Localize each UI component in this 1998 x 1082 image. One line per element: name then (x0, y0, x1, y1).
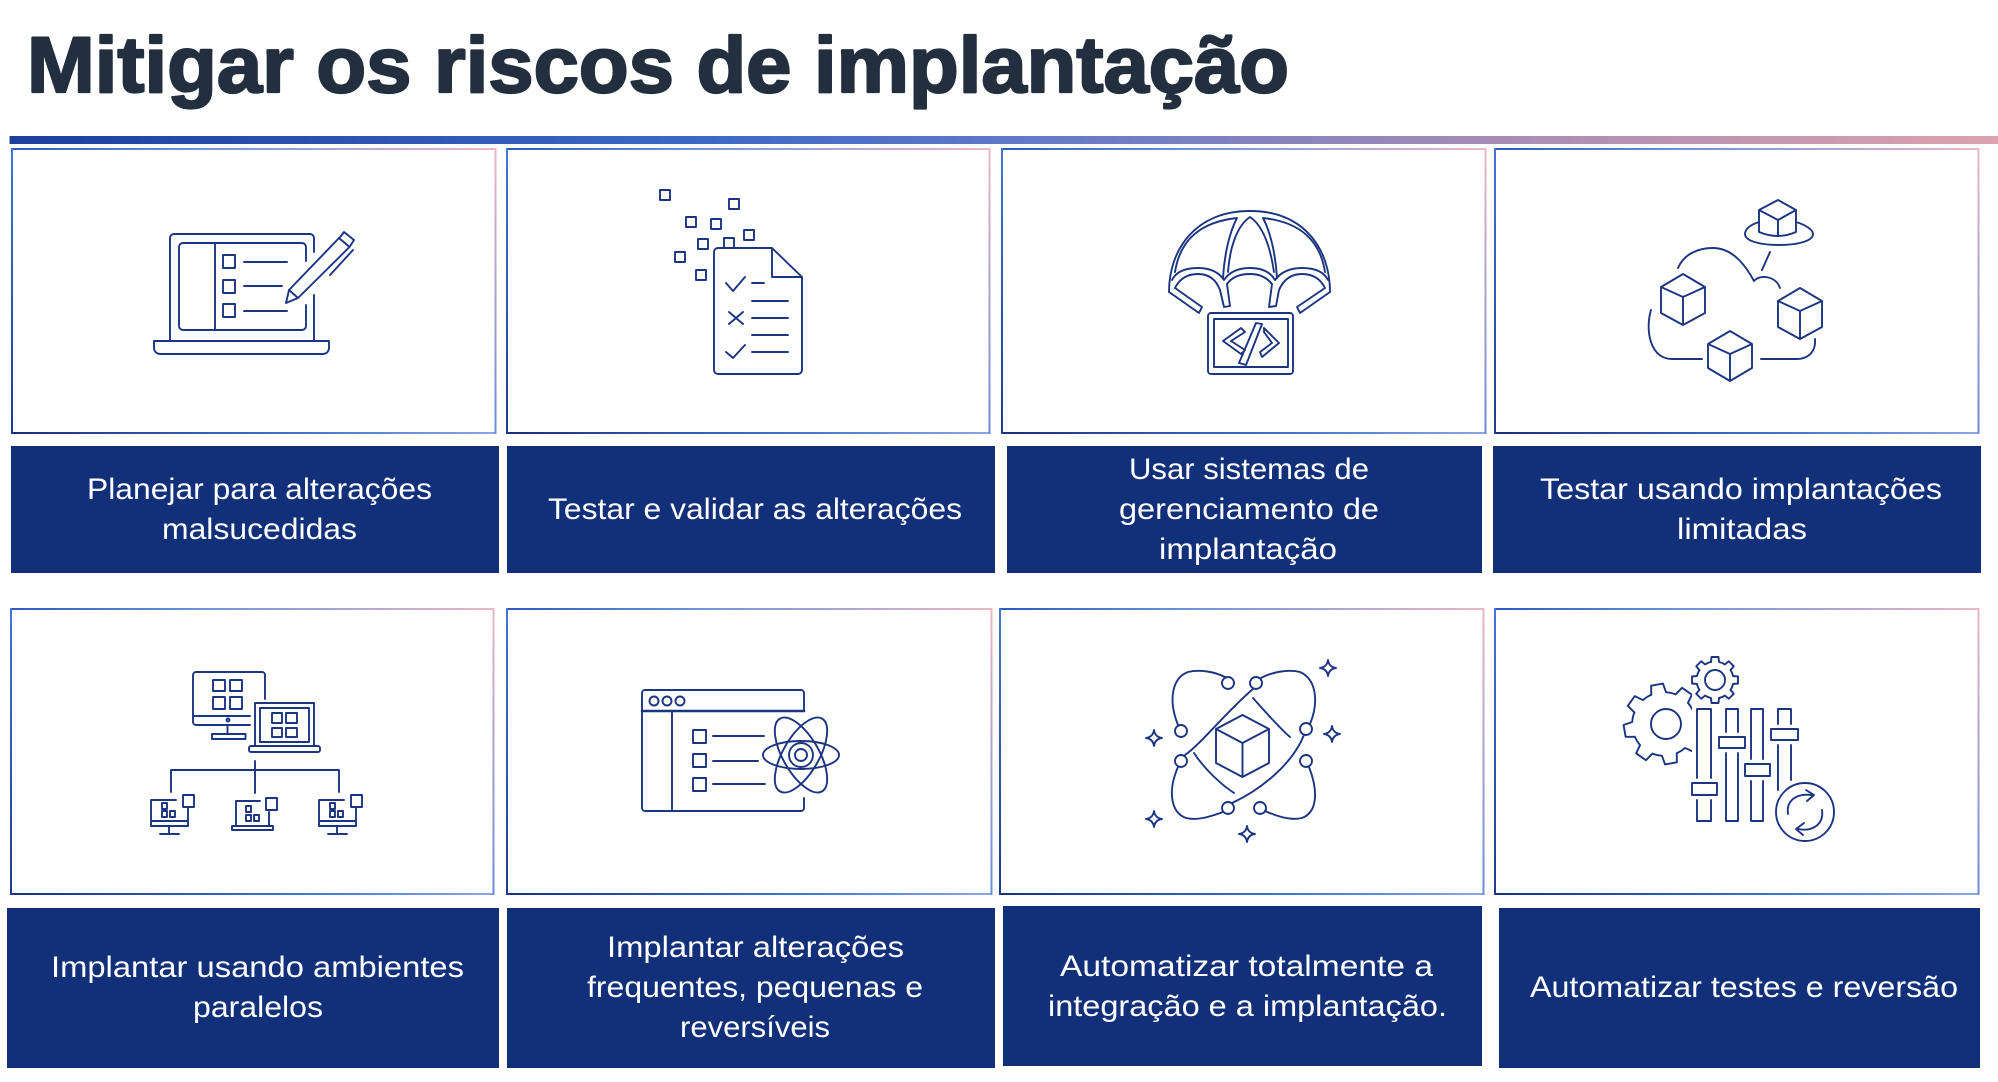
gradient title rule (10, 136, 1998, 144)
caption: deployment management systems: implantação (1159, 533, 1337, 566)
caption: full automation: Automatizar totalmente a (1060, 950, 1433, 983)
caption: full automation: integração e a implantação. (1048, 990, 1447, 1023)
icon: checklist document with squares (660, 190, 802, 374)
caption: limited deployments (1493, 446, 1981, 573)
caption: automate tests and rollback (1499, 908, 1980, 1068)
caption: automate tests and rollback: Automatizar testes e reversão (1530, 971, 1958, 1004)
icon: cube with orbits and sparkles (1146, 660, 1340, 842)
caption: deployment management systems (1007, 446, 1482, 573)
caption: test and validate: Testar e validar as alterações (548, 493, 962, 526)
caption: limited deployments: Testar usando implantações (1540, 473, 1942, 506)
icon: laptop with checklist and pencil (154, 232, 354, 354)
caption: parallel environments: Implantar usando ambientes (51, 951, 464, 984)
panel: test and validate (506, 148, 990, 434)
caption: frequent small reversible changes: reversíveis (680, 1011, 830, 1044)
icon: parachute with code box (1169, 211, 1330, 374)
caption: frequent small reversible changes (507, 908, 995, 1068)
caption: parallel environments (7, 908, 499, 1068)
caption: plan for failure: Planejar para alterações (87, 473, 432, 506)
icon: browser window with atom (642, 690, 839, 811)
caption: parallel environments: paralelos (193, 991, 323, 1024)
caption: test and validate (507, 446, 995, 573)
caption: plan for failure (11, 446, 499, 573)
caption: limited deployments: limitadas (1677, 513, 1807, 546)
panel: plan for failure (11, 148, 496, 434)
panel: deployment management systems (1001, 148, 1486, 434)
caption: frequent small reversible changes: Implantar alterações (607, 931, 904, 964)
panel: limited deployments (1494, 148, 1980, 434)
caption: plan for failure: malsucedidas (162, 513, 357, 546)
panel: parallel environments (10, 608, 494, 895)
panel: automate tests and rollback (1494, 608, 1980, 895)
icon: cloud with cubes (1649, 200, 1822, 381)
icon: computers network tree (151, 672, 362, 834)
caption: full automation (1003, 906, 1482, 1066)
caption: frequent small reversible changes: frequentes, pequenas e (587, 971, 923, 1004)
icon: gears, sliders and refresh circle (1618, 657, 1834, 841)
panel: frequent small reversible changes (506, 608, 992, 895)
panel: full automation (999, 608, 1484, 895)
caption: deployment management systems: gerenciamento de (1119, 493, 1379, 526)
title: Mitigar os riscos de implantação (27, 20, 1289, 109)
caption: deployment management systems: Usar sistemas de (1129, 453, 1369, 486)
